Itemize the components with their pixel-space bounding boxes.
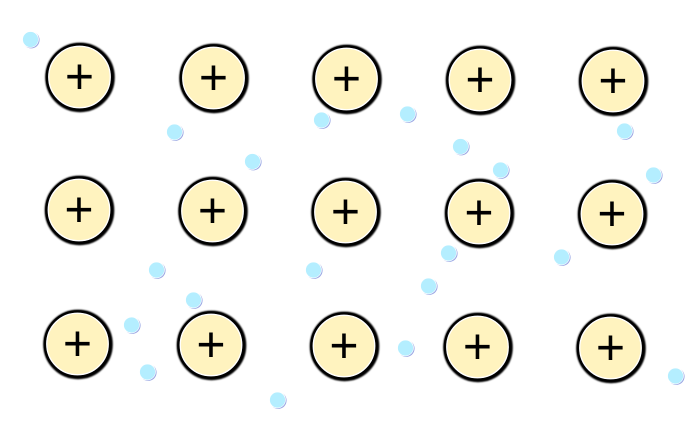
- ion 14: +: [463, 318, 492, 374]
- ion 13: +: [329, 318, 359, 374]
- ion 9: +: [464, 184, 494, 240]
- ion 11: +: [63, 316, 92, 372]
- ion 10: +: [597, 186, 627, 242]
- ion 4: [447, 47, 514, 114]
- ion 10: [579, 181, 646, 248]
- ion 4: +: [465, 52, 495, 108]
- ion 2: [181, 45, 247, 112]
- ion 7: +: [198, 182, 227, 238]
- positive ion row 1: [47, 44, 647, 115]
- ion 9: [446, 180, 513, 247]
- ion 6: [46, 177, 113, 244]
- ion 7: [180, 178, 246, 245]
- ion 11: [45, 311, 111, 378]
- ion 3: [314, 46, 380, 113]
- ion 3: +: [332, 50, 361, 106]
- positive ion row 2: [46, 177, 646, 248]
- ion 5: +: [598, 52, 628, 108]
- ion 8: +: [331, 184, 360, 240]
- ion 1: [47, 44, 113, 111]
- ion 8: [313, 179, 379, 246]
- ion 13: [311, 313, 378, 380]
- ion 1: +: [65, 48, 94, 104]
- ion 5: [580, 48, 647, 115]
- ion 2: +: [199, 50, 228, 106]
- ion 15: [578, 315, 644, 382]
- ion 12: +: [196, 316, 226, 372]
- ion 6: +: [64, 182, 94, 238]
- ion 15: +: [596, 320, 625, 376]
- ion 12: [178, 312, 245, 379]
- positive ion row 3: [45, 311, 644, 382]
- ion 14: [445, 314, 511, 381]
